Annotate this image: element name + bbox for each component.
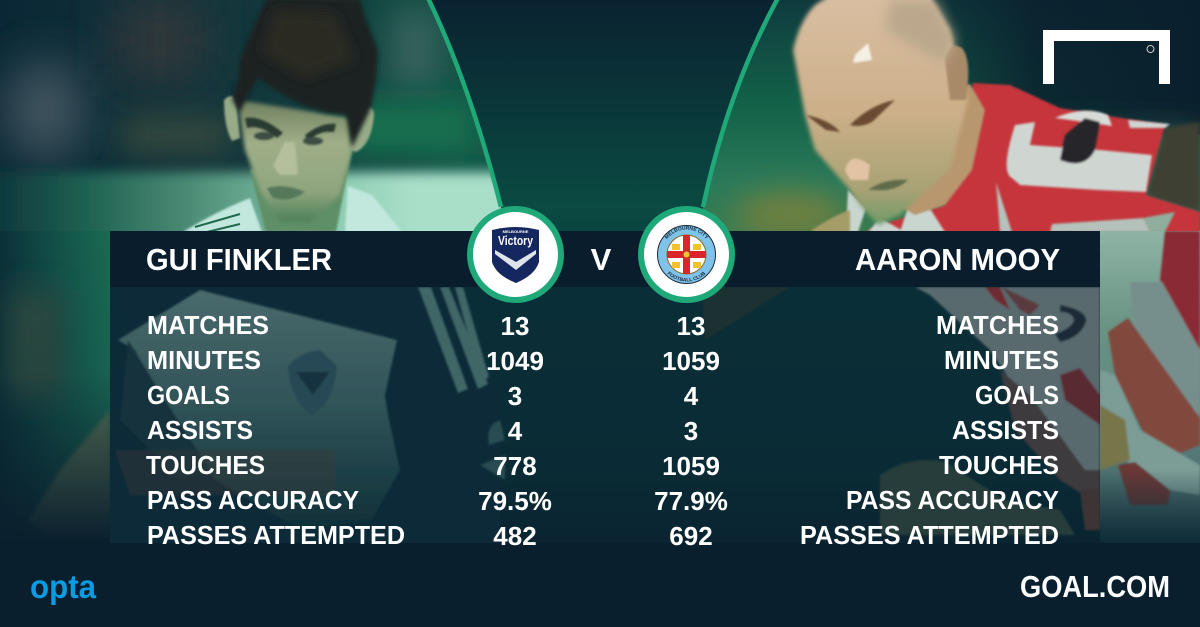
badge: Melbourne City: MELBOURNE CITY bbox=[664, 226, 709, 239]
stats: Mooy values: 692 bbox=[669, 521, 713, 551]
stats: Finkler values: 79.5% bbox=[478, 486, 552, 516]
side strip: left photo bbox=[0, 231, 110, 545]
stats: left labels: TOUCHES bbox=[146, 450, 265, 480]
stats panel backdrop bbox=[110, 287, 1100, 543]
photo: Aaron Mooy bbox=[700, 0, 1200, 240]
stats: Mooy values: 77.9% bbox=[654, 486, 728, 516]
stats: right labels: TOUCHES bbox=[939, 450, 1059, 480]
stats: Mooy values: 13 bbox=[677, 311, 705, 341]
stats: left labels: ASSISTS bbox=[147, 415, 253, 445]
hair bbox=[232, 0, 378, 148]
badge: Melbourne Victory bbox=[467, 206, 564, 303]
face bbox=[238, 100, 352, 222]
arc: left bbox=[428, 0, 501, 207]
logo: GOAL.COM: GOAL.COM bbox=[1020, 569, 1170, 604]
stats: left labels: PASSES ATTEMPTED bbox=[147, 520, 405, 550]
stats: left labels: PASS ACCURACY bbox=[147, 485, 359, 515]
stats: left labels bbox=[146, 310, 405, 550]
stats: left labels: MATCHES bbox=[147, 310, 269, 340]
stats: right labels: GOALS bbox=[975, 380, 1059, 410]
white stripes bbox=[1007, 122, 1152, 192]
badge: Melbourne Victory: MELBOURNE bbox=[503, 229, 529, 234]
shirt collar bbox=[183, 186, 402, 232]
badge: Melbourne Victory: Victory bbox=[498, 233, 534, 248]
neck bbox=[250, 150, 352, 232]
stats: Finkler values: 778 bbox=[493, 451, 537, 481]
badge: Melbourne City: FOOTBALL CLUB bbox=[668, 271, 706, 282]
logo: opta: opta bbox=[30, 568, 97, 605]
logo: goal frame bbox=[1043, 30, 1170, 84]
stats: right labels: ASSISTS bbox=[952, 415, 1059, 445]
heading: right player: AARON MOOY bbox=[855, 242, 1060, 277]
skin bbox=[810, 210, 850, 232]
stats: right labels bbox=[800, 310, 1059, 550]
header bar bbox=[110, 231, 1100, 287]
stats: Mooy values: 1059 bbox=[662, 451, 720, 481]
stats: left labels: MINUTES bbox=[147, 345, 261, 375]
stats: right labels: PASS ACCURACY bbox=[846, 485, 1059, 515]
arm bbox=[1148, 122, 1200, 212]
side strip: right photo bbox=[1100, 231, 1200, 543]
stats: Mooy values: 4 bbox=[684, 381, 699, 411]
stats: Finkler values: 13 bbox=[501, 311, 529, 341]
stats: Finkler values: 3 bbox=[508, 381, 522, 411]
stats: right labels: PASSES ATTEMPTED bbox=[800, 520, 1059, 550]
stats: Mooy values bbox=[654, 311, 728, 551]
red shirt bbox=[850, 83, 1200, 240]
badge: Melbourne City bbox=[638, 206, 735, 303]
stats: Mooy values: 3 bbox=[684, 416, 698, 446]
arc: right bbox=[703, 0, 778, 207]
stats: Mooy values: 1059 bbox=[662, 346, 720, 376]
stats: Finkler values bbox=[478, 311, 552, 551]
stats: Finkler values: 1049 bbox=[486, 346, 544, 376]
right shirt bbox=[702, 287, 1100, 535]
photo: Gui Finkler bbox=[0, 0, 520, 247]
stats: left labels: GOALS bbox=[147, 380, 230, 410]
stats: Finkler values: 4 bbox=[508, 416, 523, 446]
stats: right labels: MINUTES bbox=[944, 345, 1059, 375]
heading: left player: GUI FINKLER bbox=[146, 242, 332, 277]
stats: right labels: MATCHES bbox=[936, 310, 1059, 340]
left shirt bbox=[115, 287, 505, 530]
heading: versus: V bbox=[591, 242, 612, 277]
ears bbox=[224, 96, 374, 152]
stats: Finkler values: 482 bbox=[493, 521, 537, 551]
